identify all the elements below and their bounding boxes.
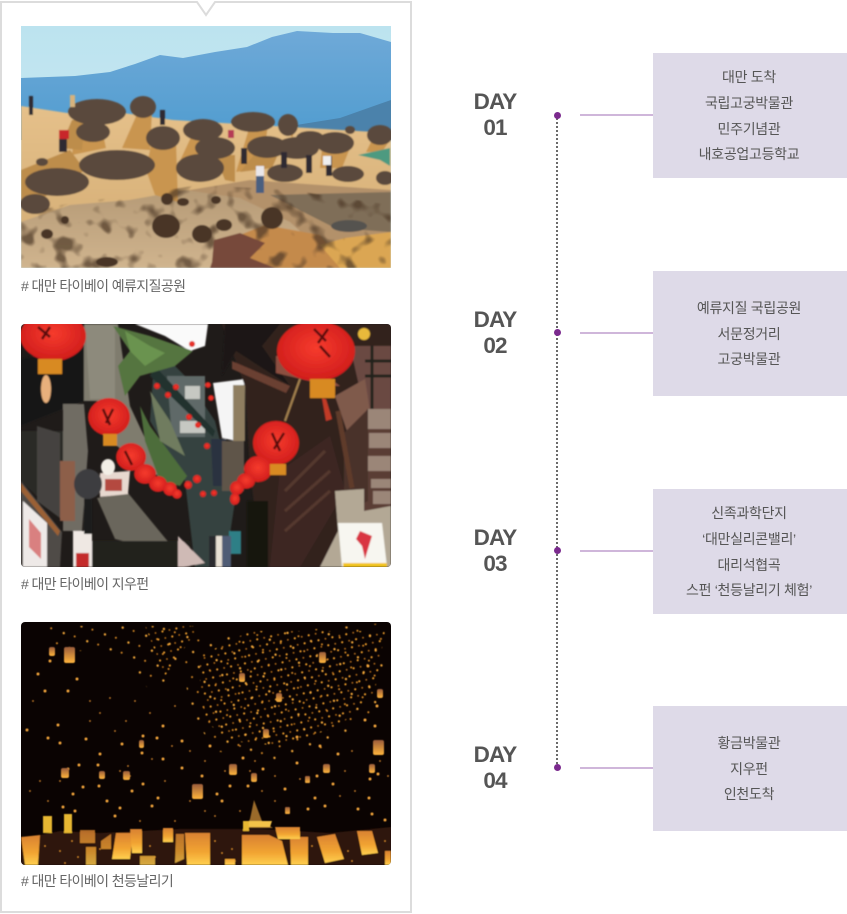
temple <box>245 800 273 828</box>
floating lanterns <box>49 646 384 814</box>
day 2 marker <box>554 328 560 336</box>
shop awning and sign <box>97 492 170 548</box>
day 3 connector <box>580 550 653 552</box>
day 4 box: 황금박물관 <box>718 735 780 751</box>
caption: sky lanterns: # 대만 타이베이 천등날리기 <box>21 873 173 889</box>
day 3 label: DAY <box>474 525 516 550</box>
day 1 box: 대만 도착 <box>722 69 776 85</box>
lantern markings <box>38 326 330 464</box>
day 4 label: DAY <box>474 742 516 767</box>
day 1 box: 민주기념관 <box>718 120 780 136</box>
street lamp <box>74 468 102 498</box>
day 1 box: 국립고궁박물관 <box>705 95 793 111</box>
people <box>214 536 222 566</box>
day 2 box: 서문정거리 <box>718 326 780 342</box>
day 2 label <box>474 307 517 358</box>
day 2 label: 02 <box>483 332 507 358</box>
day 1 label <box>474 89 517 140</box>
day 3 box: 스펀 ‘천등날리기 체험’ <box>686 582 812 598</box>
day 3 box: ‘대만실리콘밸리’ <box>702 531 796 547</box>
day 1 label: 01 <box>483 114 507 140</box>
day 4 box <box>653 706 847 831</box>
teal house <box>150 346 235 566</box>
day 4 connector <box>580 767 653 769</box>
day 4 box: 지우펀 <box>730 761 768 777</box>
panel: photo card with notch <box>0 1 412 913</box>
dense lantern cloud <box>145 626 385 746</box>
day 3 label: 03 <box>483 550 507 576</box>
sky gaps <box>135 324 208 350</box>
day 1 label: DAY <box>474 89 516 114</box>
foliage <box>113 326 193 396</box>
photo: Jiufen lantern alley <box>21 324 391 567</box>
center banner and far buildings <box>233 384 245 440</box>
day 3 box: 대리석협곡 <box>718 556 780 572</box>
day 2 label: DAY <box>474 307 516 332</box>
right building <box>222 324 391 566</box>
day 4 label <box>474 742 517 792</box>
timeline: dotted vertical line <box>556 115 558 767</box>
day 1 box <box>653 53 847 178</box>
day 4 box: 인천도착 <box>724 786 774 802</box>
rock stems <box>72 112 390 202</box>
photo: sky lantern festival <box>21 622 391 865</box>
people <box>29 95 332 193</box>
scattered lantern dots <box>27 660 385 820</box>
day 3 box: 신족과학단지 <box>711 505 787 521</box>
day 2 connector <box>580 332 653 334</box>
day 1 marker <box>554 112 560 118</box>
photo: Yehliu geopark rock formations <box>21 26 391 268</box>
day 1 connector <box>580 114 653 116</box>
left facade <box>84 324 165 480</box>
day 2 box: 예류지질 국립공원 <box>697 300 801 316</box>
day 4 label: 04 <box>483 768 507 792</box>
day 3 marker <box>554 546 560 554</box>
honeycomb holes and texture <box>21 186 391 268</box>
day 3 label <box>474 525 517 576</box>
bottom lantern crowd <box>21 826 391 864</box>
day 2 box: 고궁박물관 <box>718 351 780 367</box>
caption: Yehliu: # 대만 타이베이 예류지질공원 <box>21 278 185 294</box>
day 1 box: 내호공업고등학교 <box>699 146 799 162</box>
day 4 marker <box>554 764 560 770</box>
lanterns <box>20 310 355 504</box>
caption: Jiufen: # 대만 타이베이 지우펀 <box>21 576 149 592</box>
day 3 box <box>653 489 847 614</box>
rock heads <box>20 96 394 214</box>
day 2 box <box>653 271 847 396</box>
